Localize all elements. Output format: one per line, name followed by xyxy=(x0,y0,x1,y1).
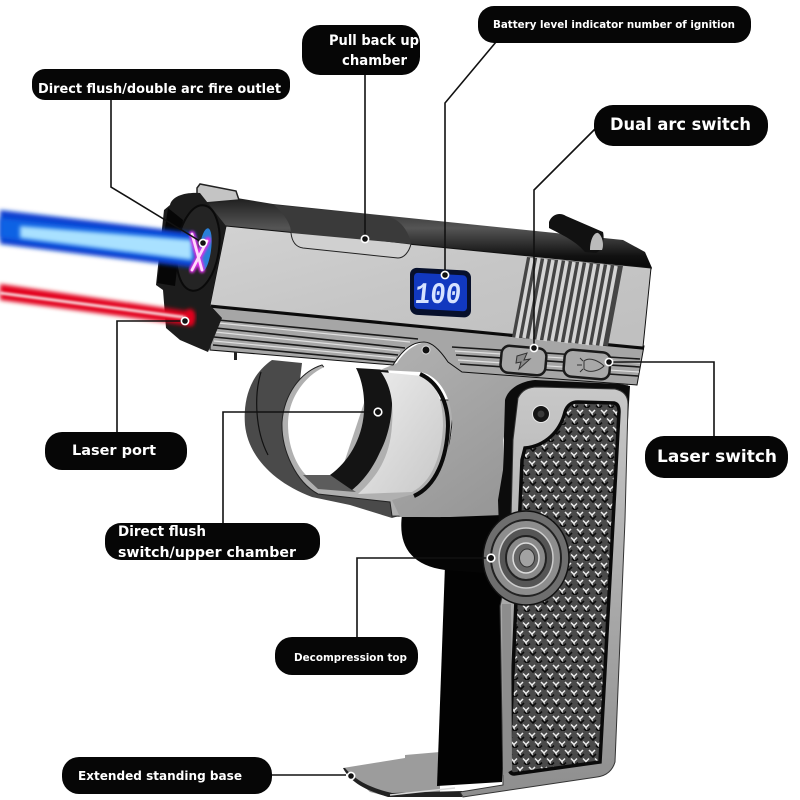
trigger guard xyxy=(245,360,455,518)
label: extended standing base: Extended standing base xyxy=(78,768,242,783)
front sight xyxy=(197,184,239,203)
digital display xyxy=(410,267,471,318)
label: battery level indicator xyxy=(441,6,751,279)
label: decompression top xyxy=(275,554,495,675)
base: extended standing base xyxy=(343,752,462,797)
label: direct flush / double arc fire outlet: Direct flush/double arc fire outlet xyxy=(38,81,282,97)
label: pull back up chamber xyxy=(302,25,420,243)
label: dual arc switch: Dual arc switch xyxy=(610,115,751,135)
label: dual arc switch xyxy=(530,105,768,352)
X-shaped arc spark xyxy=(192,234,208,270)
trigger dark outer edge xyxy=(414,374,448,496)
trigger guard lower inner band xyxy=(303,475,356,492)
label: laser port: Laser port xyxy=(72,443,156,459)
label: laser switch: Laser switch xyxy=(657,447,777,467)
grip dark edge xyxy=(498,380,630,560)
takedown pin under rail xyxy=(234,352,237,360)
rear sight xyxy=(549,214,604,253)
slide pull-back recess xyxy=(291,230,411,258)
frame pivot pin xyxy=(422,346,430,354)
rail under slide xyxy=(210,304,644,385)
button: laser switch xyxy=(563,349,611,380)
compression knob xyxy=(483,511,569,605)
label: laser switch xyxy=(605,358,788,478)
label: laser port xyxy=(45,317,189,470)
muzzle xyxy=(156,193,226,352)
grip frame xyxy=(460,387,628,797)
grip texture panel xyxy=(509,402,619,774)
trigger guard opening xyxy=(288,364,365,475)
frame body xyxy=(380,342,628,517)
label: pull back up chamber: chamber xyxy=(342,53,407,69)
grip screw xyxy=(532,406,550,422)
label: direct flush switch / upper chamber xyxy=(105,408,382,561)
label: pull back up chamber: Pull back up xyxy=(329,33,419,49)
black drum behind knob xyxy=(401,493,515,575)
button: dual arc switch xyxy=(500,345,547,376)
label: battery level indicator: Battery level indicator number of ignition xyxy=(493,18,735,31)
trigger xyxy=(358,372,443,494)
red laser beam xyxy=(0,284,195,326)
black compression column xyxy=(437,565,510,786)
label: direct flush / double arc fire outlet xyxy=(32,69,290,247)
lower band of grip xyxy=(502,604,512,775)
trigger black crescent xyxy=(330,368,392,490)
label: extended standing base xyxy=(62,757,355,794)
digital display: 100 xyxy=(413,279,463,313)
slide side panel xyxy=(210,226,651,347)
label: direct flush switch / upper chamber: Direct flush xyxy=(118,524,206,540)
rear slide serrations xyxy=(512,257,623,346)
blue flame xyxy=(0,210,195,268)
label: decompression top: Decompression top xyxy=(294,652,407,664)
slide top xyxy=(200,192,652,272)
recess curved cover xyxy=(274,205,411,244)
label: direct flush switch / upper chamber: switch/upper chamber xyxy=(118,545,296,561)
